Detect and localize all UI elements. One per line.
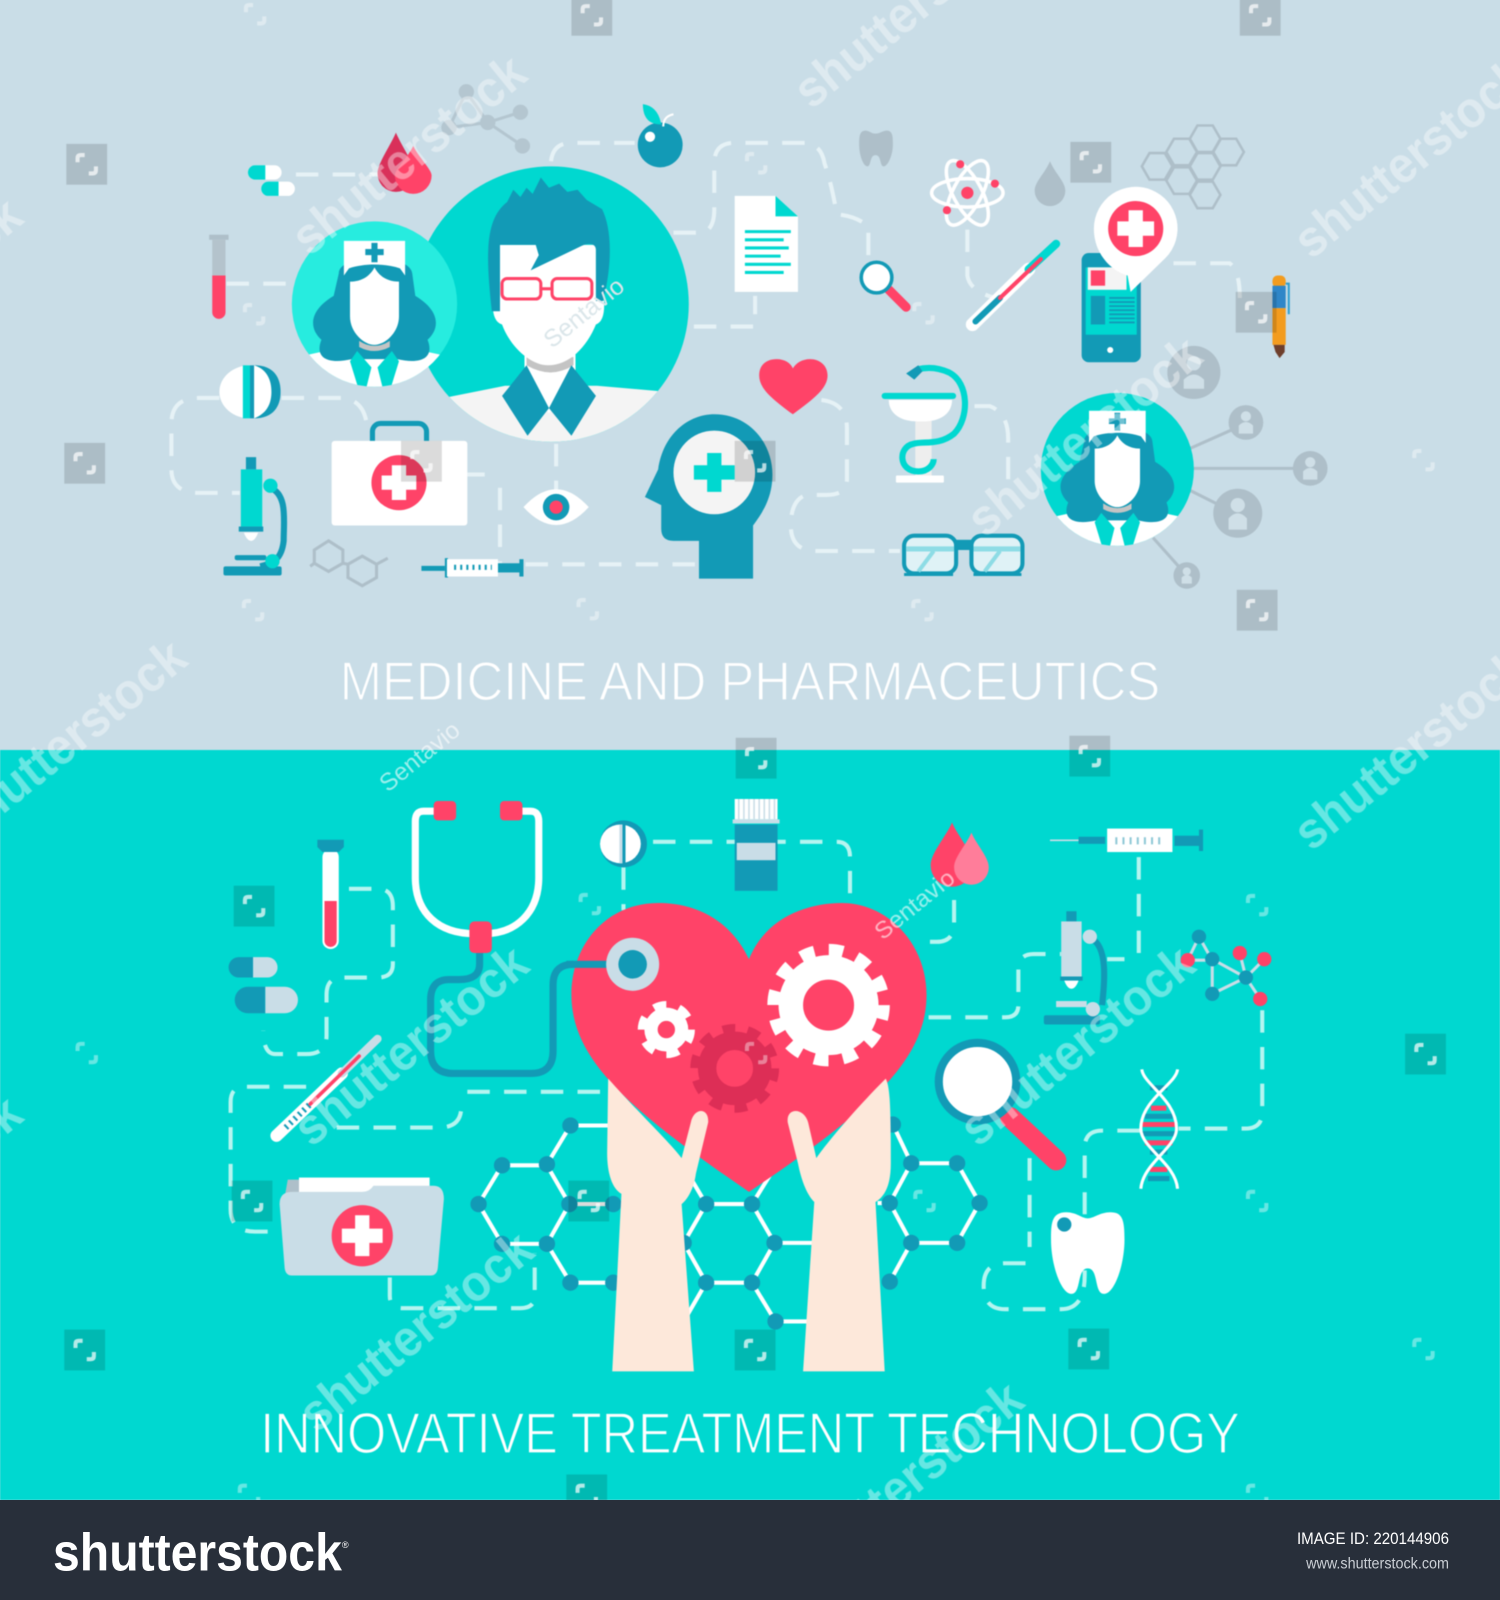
icon: bowl of hygieia	[882, 365, 965, 483]
icon: small white gear	[642, 1005, 691, 1054]
icon: grey molecule top	[443, 86, 529, 152]
icon: magnifier top	[861, 262, 906, 307]
icon: pill top	[219, 365, 281, 418]
icon: grey drop	[1035, 161, 1065, 206]
icon: thermometer bottom	[277, 1039, 378, 1136]
icon: pen	[1272, 276, 1289, 358]
icon: dark gear	[696, 1030, 773, 1107]
icon: blood drops bottom	[931, 822, 989, 887]
watermark text: shutterstock	[949, 933, 1205, 1157]
watermark text: shutterstock	[956, 324, 1213, 547]
icon: head with cross	[645, 414, 772, 579]
icon: stethoscope connector	[469, 921, 492, 953]
icon: nurse avatar left	[291, 220, 458, 387]
icon: blood drops top	[378, 133, 432, 194]
icon: document	[735, 196, 798, 292]
watermark author credits	[375, 273, 960, 945]
watermark author credits: Sentavio	[869, 865, 960, 945]
icon: magnifier bottom	[939, 1043, 1056, 1160]
icon: doctor avatar	[413, 166, 689, 449]
icon: molecule red	[1181, 930, 1271, 1006]
icon: atom	[932, 155, 1003, 231]
icon: honeycomb	[1142, 126, 1244, 208]
icon: medicine jar	[733, 799, 780, 891]
icon: DNA helix	[1141, 1069, 1178, 1189]
watermark author credits: Sentavio	[539, 273, 630, 354]
panel: top background	[0, 0, 1500, 750]
footer registered mark: ®	[342, 1540, 349, 1550]
footer logo: shutterstock	[53, 1523, 342, 1582]
watermark text: shutterstock	[777, 1369, 1034, 1592]
icon: grey molecule bottom	[310, 541, 388, 586]
icon: left hand	[607, 1079, 708, 1371]
icon: eye	[523, 489, 589, 525]
icon: large white gear	[773, 950, 884, 1060]
icon: heart with gears	[566, 903, 927, 1192]
footer website: www.shutterstock.com	[1305, 1555, 1449, 1572]
chart: hexagon network	[470, 1116, 988, 1330]
icon: nurse avatar right	[1040, 392, 1195, 546]
watermark text: shutterstock	[282, 933, 539, 1157]
icon: first aid kit top	[332, 423, 467, 526]
icon: microscope bottom	[1044, 911, 1104, 1024]
icon: test tube bottom	[317, 840, 344, 949]
icon: folder	[280, 1178, 444, 1276]
icon: stethoscope tube over heart and chest piece	[566, 938, 659, 991]
icon: thermometer top	[972, 244, 1056, 324]
icon: tooth	[1051, 1212, 1124, 1294]
icon: heart small	[759, 359, 828, 414]
icon: eyeglasses	[904, 536, 1022, 574]
icon: syringe top	[421, 558, 523, 578]
footer image id: IMAGE ID: 220144906	[1297, 1530, 1449, 1548]
heading: top title: MEDICINE AND PHARMACEUTICS	[340, 650, 1160, 712]
watermark text: shutterstock	[280, 43, 537, 266]
heading: bottom title: INNOVATIVE TREATMENT TECHNOLOGY	[260, 1402, 1240, 1466]
icon: capsules bottom	[229, 957, 298, 1013]
icon: phone	[1082, 253, 1141, 362]
icon: apple	[638, 104, 683, 167]
icon: test tube top	[209, 235, 229, 319]
icon: map pin	[1094, 187, 1178, 292]
icon: microscope top	[223, 457, 284, 576]
icon: right hand	[788, 1079, 891, 1371]
icon: grey tooth	[859, 131, 893, 166]
icon: pill bottom	[600, 820, 647, 867]
watermark text: shutterstock	[287, 1219, 544, 1442]
icon: user network	[1153, 346, 1328, 589]
watermark author credits: Sentavio	[375, 717, 466, 798]
icon: stethoscope	[415, 801, 573, 1073]
icon: syringe bottom	[1050, 829, 1203, 852]
bottom dashed connectors	[231, 842, 1262, 1309]
icon: capsules top	[248, 165, 295, 196]
panel: bottom background	[0, 750, 1500, 1500]
top dashed connectors	[171, 143, 1240, 564]
panel: footer bar	[0, 1500, 1500, 1600]
